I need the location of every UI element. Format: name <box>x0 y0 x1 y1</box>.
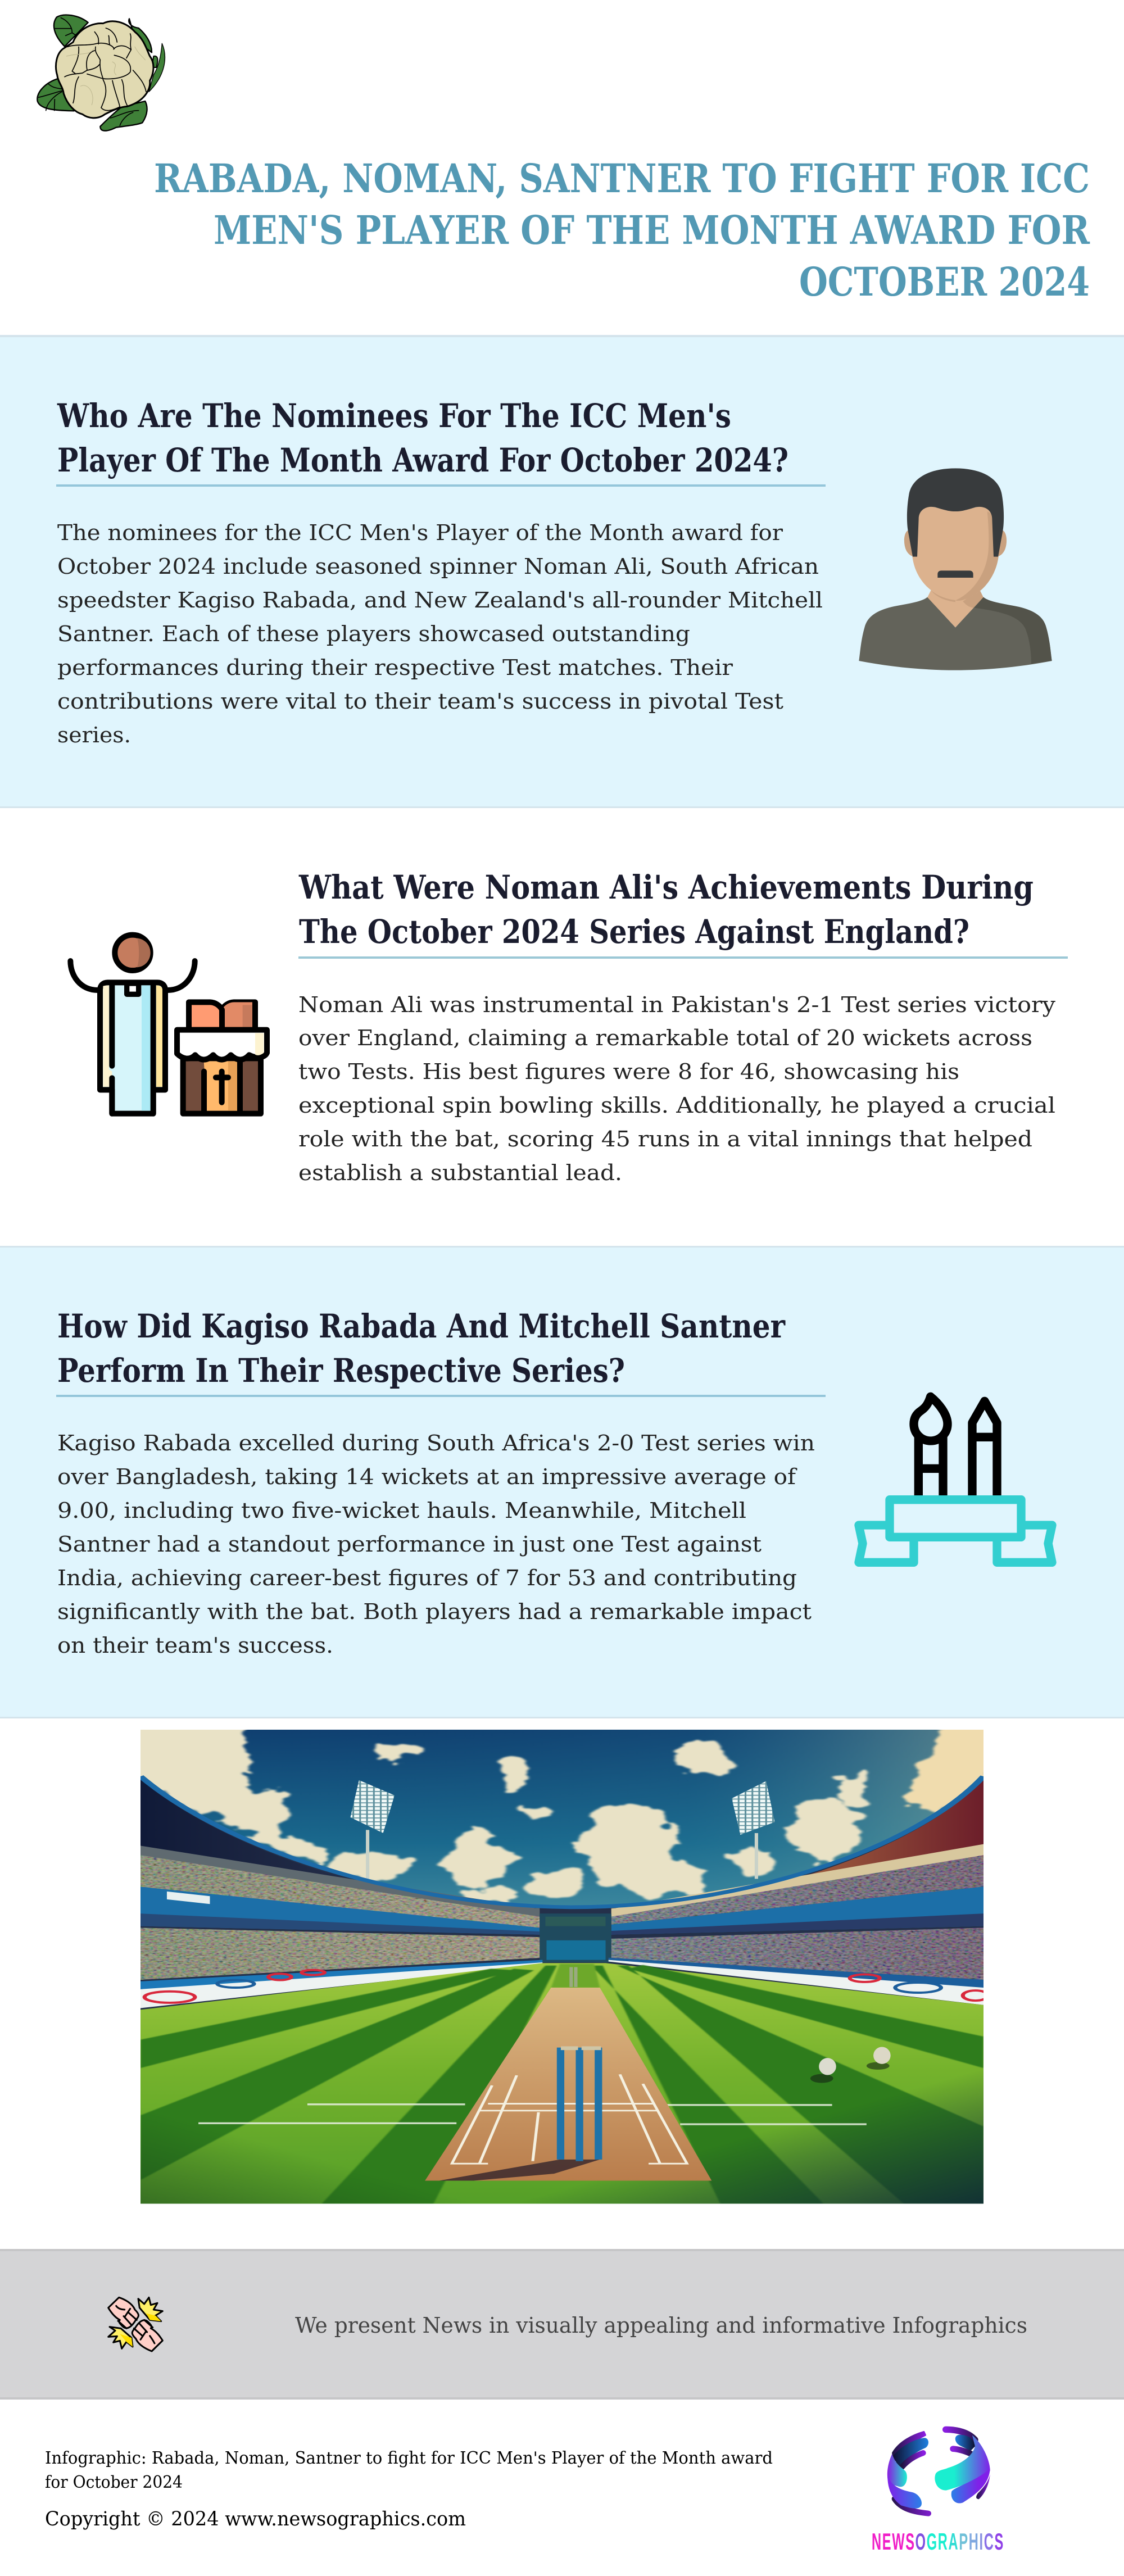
text block: Rabada and Santner: over Bangladesh, taking 14 wickets at an impressive average of <box>57 1464 797 1489</box>
text block: Noman Ali: establish a substantial lead. <box>298 1160 622 1185</box>
balls <box>810 2047 891 2083</box>
icon: fist bump <box>108 2297 162 2351</box>
text block: Noman Ali: exceptional spin bowling skills. Additionally, he played a crucial <box>298 1093 1055 1118</box>
text block: Rabada and Santner: India, achieving career-best figures of 7 for 53 and contributing <box>57 1566 797 1590</box>
panel: Noman Ali achievements <box>0 808 1124 1246</box>
band: tagline <box>0 2249 1124 2400</box>
text block: Noman Ali: two Tests. His best figures were 8 for 46, showcasing his <box>298 1059 959 1084</box>
text block: nominees: contributions were vital to their team's success in pivotal Test <box>57 689 783 714</box>
text block: nominees: performances during their respective Test matches. Their <box>57 655 733 680</box>
pitch <box>425 1988 711 2180</box>
panel: Rabada and Santner <box>0 1246 1124 1718</box>
text block: Noman Ali: Noman Ali was instrumental in Pakistan's 2-1 Test series victory <box>298 992 1056 1017</box>
field markings <box>198 2105 867 2124</box>
copyright text: Copyright © 2024 www.newsographics.com <box>45 2508 466 2530</box>
text block: Rabada and Santner: significantly with the bat. Both players had a remarkable impact <box>57 1599 812 1624</box>
icon: cauliflower logo <box>37 15 165 131</box>
caption text: Infographic: Rabada, Noman, Santner to fight for ICC Men's Player of the Month award <box>45 2448 773 2468</box>
clouds <box>124 1723 995 1902</box>
text block: Noman Ali: role with the bat, scoring 45 runs in a vital innings that helped <box>298 1127 1032 1151</box>
text block: nominees: The nominees for the ICC Men's Player of the Month award for <box>57 520 783 545</box>
text block: nominees: October 2024 include seasoned spinner Noman Ali, South African <box>57 554 819 579</box>
stands <box>140 1776 984 2013</box>
heading: nominees <box>57 397 788 479</box>
heading: Rabada and Santner <box>57 1307 786 1390</box>
header panel <box>37 15 1090 305</box>
heading: Noman Ali <box>298 868 1034 951</box>
footer <box>45 2429 1004 2555</box>
text block: Rabada and Santner: Kagiso Rabada excelled during South Africa's 2-0 Test series win <box>57 1431 815 1455</box>
text block: Noman Ali: over England, claiming a remarkable total of 20 wickets across <box>298 1026 1032 1050</box>
text block: Rabada and Santner: 9.00, including two five-wicket hauls. Meanwhile, Mitchell <box>57 1498 746 1523</box>
heading rule <box>56 1395 826 1397</box>
text block: nominees: Santner. Each of these players showcased outstanding <box>57 622 690 646</box>
caption text <box>45 2448 773 2492</box>
floodlights <box>350 1780 775 1879</box>
icon: man portrait <box>859 468 1052 670</box>
text block: nominees: series. <box>57 723 131 747</box>
wicket <box>557 2046 602 2161</box>
heading: Rabada and Santner: Perform In Their Respective Series? <box>57 1352 625 1390</box>
heading: nominees: Who Are The Nominees For The ICC Men's <box>57 397 731 435</box>
grass <box>140 1963 984 2203</box>
icon: figure with book and lectern <box>70 935 267 1114</box>
heading: Noman Ali: What Were Noman Ali's Achievements During <box>298 868 1034 906</box>
text block: Noman Ali <box>298 992 1056 1185</box>
icon: brush and pencil on ribbon <box>859 1396 1052 1562</box>
panel: nominees <box>0 335 1124 808</box>
heading: Rabada and Santner: How Did Kagiso Rabada And Mitchell Santner <box>57 1307 786 1345</box>
heading: nominees: Player Of The Month Award For October 2024? <box>57 441 788 479</box>
logo: Newsographics <box>872 2429 1004 2555</box>
text block: Rabada and Santner: on their team's success. <box>57 1633 333 1658</box>
tagline text: We present News in visually appealing and informative Infographics <box>295 2313 1027 2338</box>
text block: Rabada and Santner: Santner had a standout performance in just one Test against <box>57 1532 762 1557</box>
text block: nominees: speedster Kagiso Rabada, and New Zealand's all-rounder Mitchell <box>57 588 823 613</box>
heading rule <box>298 956 1068 959</box>
image: cricket stadium illustration <box>124 1723 995 2203</box>
text block: nominees <box>57 520 823 747</box>
heading rule <box>56 484 826 487</box>
text block: Rabada and Santner <box>57 1431 815 1658</box>
caption text: for October 2024 <box>45 2473 183 2492</box>
title <box>154 155 1090 305</box>
logo: Newsographics: NEWSOGRAPHICS <box>872 2528 1004 2555</box>
heading: Noman Ali: The October 2024 Series Against England? <box>299 913 969 951</box>
boundary boards <box>140 1960 542 1990</box>
